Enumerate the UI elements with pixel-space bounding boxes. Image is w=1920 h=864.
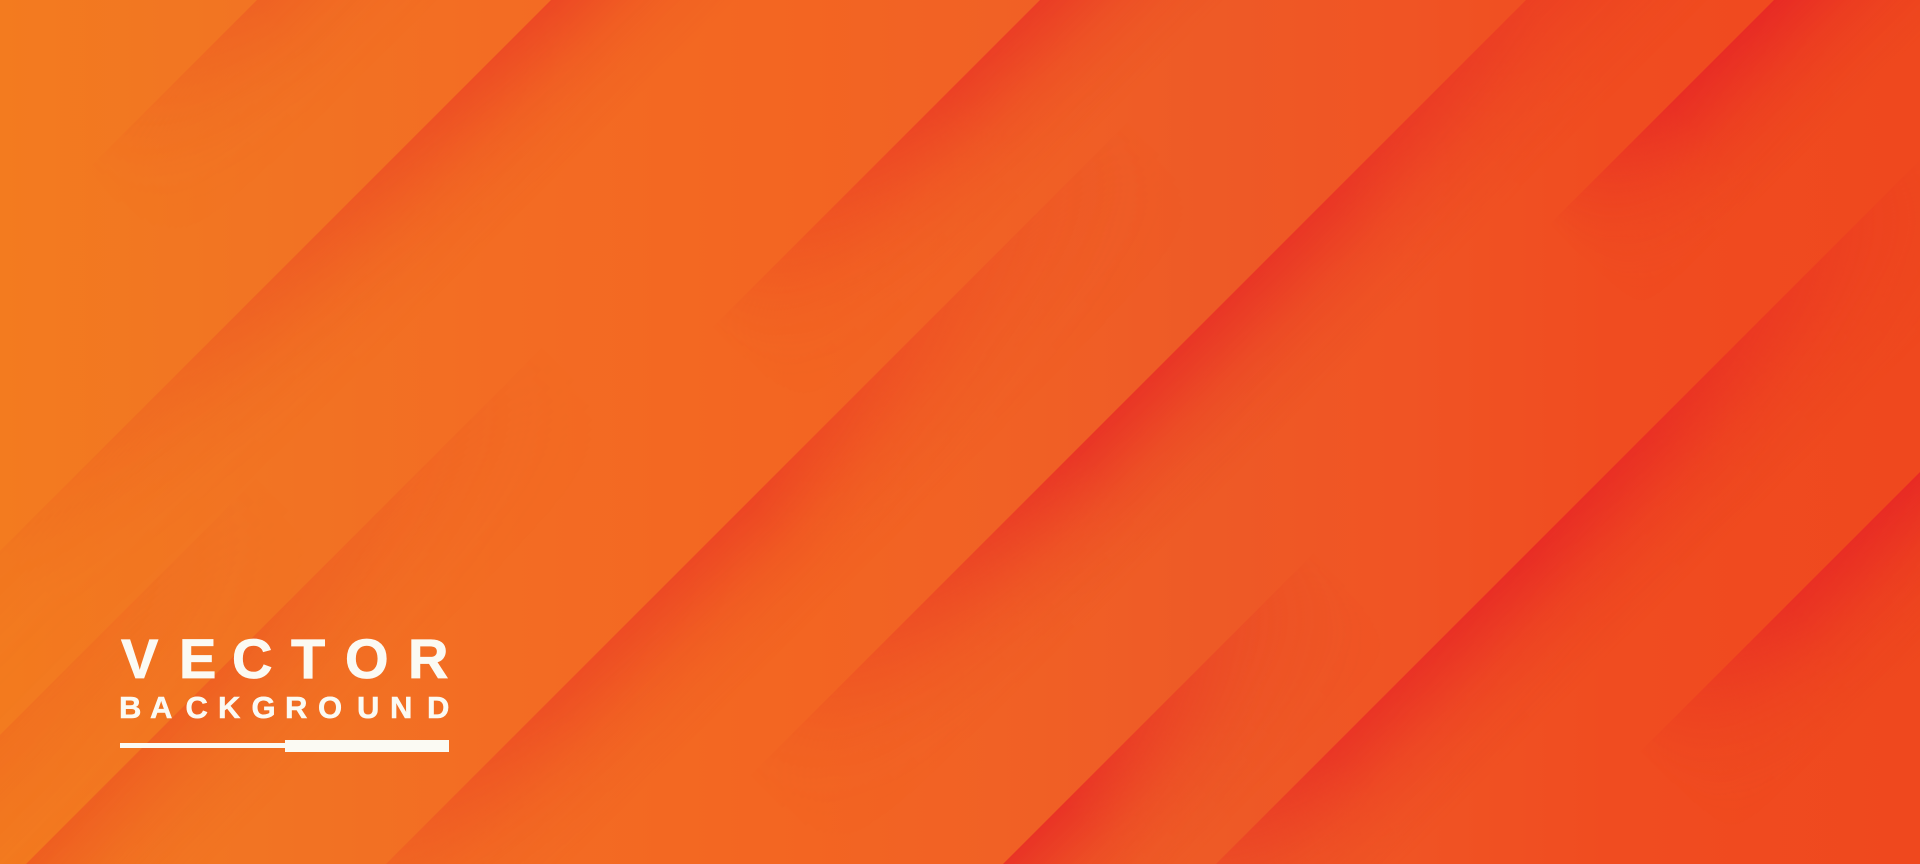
subtitle: BACKGROUND: BACKGROUND bbox=[119, 690, 449, 725]
band 7 bbox=[820, 0, 1585, 708]
band 11 bbox=[1685, 472, 1920, 710]
underline bar bbox=[120, 740, 449, 752]
band 5 bbox=[764, 0, 1148, 278]
band 8 bbox=[1581, 0, 1876, 200]
band 1 bbox=[157, 0, 325, 102]
band 3 bbox=[0, 644, 92, 770]
title block bbox=[119, 627, 449, 752]
band 6 bbox=[386, 244, 1007, 864]
band 9 bbox=[1003, 612, 1256, 864]
band 2 bbox=[72, 0, 660, 481]
title: VECTOR: VECTOR bbox=[121, 627, 448, 690]
band 4 bbox=[26, 486, 406, 864]
band 10 bbox=[1216, 238, 1848, 864]
